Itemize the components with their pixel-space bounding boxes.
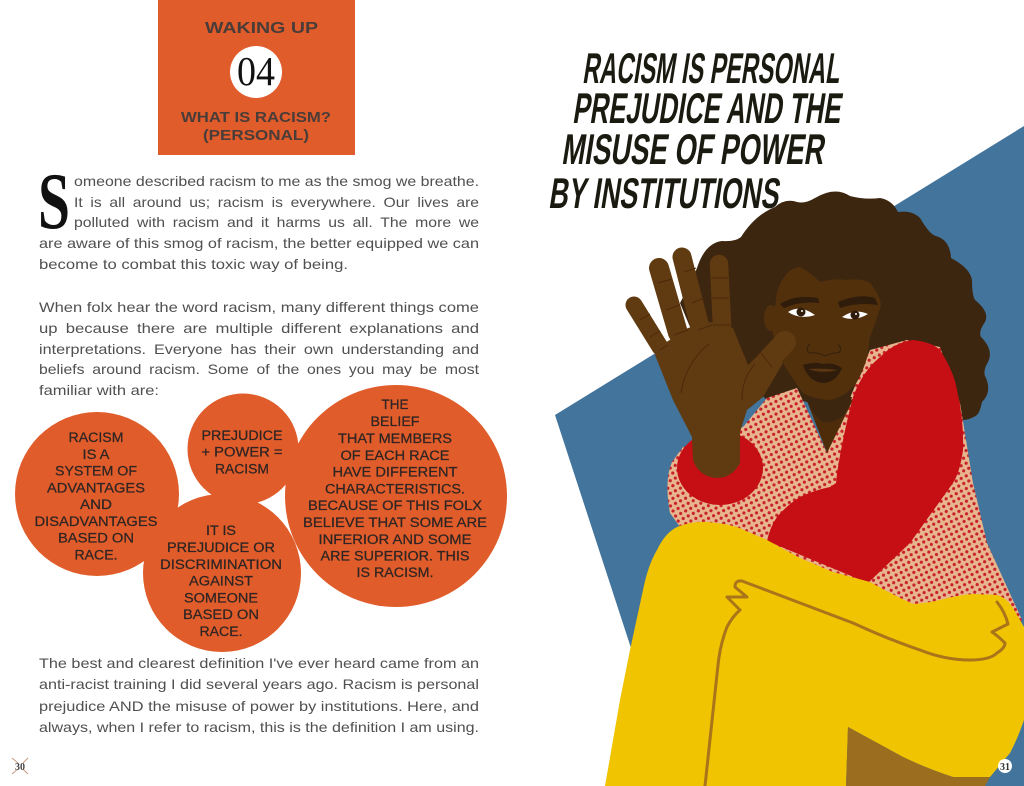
- bubble: belief about races: THE: [382, 397, 408, 412]
- palm creases: [640, 268, 772, 400]
- eye: left: [788, 308, 815, 317]
- page number 30: [12, 758, 28, 774]
- lips: [803, 363, 842, 383]
- nose: [807, 344, 840, 356]
- bubble: belief about races: THAT MEMBERS: [338, 431, 452, 446]
- drop cap S: S: [38, 158, 70, 246]
- bubble: system of advantages: RACISM: [68, 430, 124, 445]
- text block: second paragraph: [39, 299, 479, 398]
- illustration: woman holding up hand: [605, 191, 1024, 786]
- neck: [805, 396, 853, 453]
- text block: opening paragraph with drop cap: are aware of this smog of racism, the better equipped we can: [39, 235, 479, 251]
- bubble: system of advantages: IS A: [82, 447, 110, 462]
- text block: second paragraph: beliefs around racism. Some of the ones you may be most: [39, 361, 479, 377]
- bubble: belief about races: ARE SUPERIOR. THIS: [320, 548, 470, 564]
- chapter number badge: 04: [237, 48, 275, 94]
- page number 30: 30: [15, 762, 25, 773]
- text block: second paragraph: When folx hear the word racism, many different things come: [39, 299, 479, 315]
- heading: what is racism: [181, 109, 331, 144]
- text block: opening paragraph with drop cap: It is all around us; racism is everywhere. Our lives are: [74, 194, 479, 210]
- heading: waking up: WAKING UP: [205, 20, 318, 37]
- heading: what is racism: (PERSONAL): [203, 127, 309, 144]
- bubble: system of advantages: RACE.: [74, 548, 118, 562]
- bubble: prejudice plus power: PREJUDICE: [202, 428, 282, 443]
- eyebrows: [780, 296, 878, 308]
- thumb: [752, 342, 785, 378]
- text block: closing paragraph: [39, 655, 479, 735]
- neck shadow: [805, 396, 852, 422]
- trouser outline: [705, 581, 1008, 786]
- bubble: prejudice or discrimination: SOMEONE: [184, 590, 258, 606]
- bubble: belief about races: INFERIOR AND SOME: [318, 532, 472, 547]
- bubble: prejudice or discrimination: PREJUDICE OR: [167, 540, 275, 555]
- chapter number badge: [230, 46, 282, 98]
- bubble: prejudice plus power: RACISM: [215, 462, 269, 476]
- text block: second paragraph: up because there are multiple different explanations and: [39, 320, 479, 336]
- bubble: belief about races: IS RACISM.: [356, 565, 434, 580]
- text block: opening paragraph with drop cap: [38, 158, 479, 272]
- red cuff: [677, 431, 763, 505]
- bubble: prejudice or discrimination: IT IS: [206, 523, 236, 538]
- header panel: chapter label: [158, 0, 355, 155]
- text block: closing paragraph: The best and clearest definition I've ever heard came from an: [39, 655, 479, 671]
- yellow trousers: [605, 522, 1024, 786]
- ear: [764, 305, 778, 331]
- shin shadow: [846, 727, 990, 786]
- bubble: prejudice plus power: [188, 394, 298, 504]
- headline quote: [546, 45, 846, 218]
- pinky finger: [634, 305, 660, 347]
- red sleeve: [767, 340, 963, 583]
- bubble: belief about races: BECAUSE OF THIS FOLX: [308, 498, 482, 513]
- bubble: system of advantages: BASED ON: [58, 530, 134, 546]
- headline quote: MISUSE OF POWER: [559, 126, 829, 174]
- page number 31: [998, 759, 1012, 773]
- hand: [634, 257, 785, 478]
- bubble: prejudice or discrimination: DISCRIMINATION: [160, 557, 282, 572]
- bubble: system of advantages: DISADVANTAGES: [34, 514, 158, 529]
- blouse with polka dots: [667, 340, 1022, 640]
- ring finger: [659, 268, 678, 333]
- text block: second paragraph: familiar with are:: [39, 382, 159, 398]
- bubble: prejudice or discrimination: RACE.: [200, 624, 242, 639]
- text block: opening paragraph with drop cap: omeone described racism to me as the smog we breathe.: [74, 173, 479, 189]
- index finger: [719, 264, 722, 325]
- bubble: prejudice or discrimination: AGAINST: [189, 574, 253, 588]
- bubble: belief about races: BELIEF: [370, 414, 420, 429]
- headline quote: BY INSTITUTIONS: [546, 170, 784, 218]
- text block: opening paragraph with drop cap: become to combat this toxic way of being.: [39, 256, 348, 272]
- text block: closing paragraph: prejudice AND the misuse of power by institutions. Here, and: [39, 698, 479, 714]
- bubble: prejudice or discrimination: BASED ON: [183, 607, 259, 622]
- hair: [680, 191, 990, 430]
- middle finger: [682, 257, 700, 327]
- bubble: system of advantages: [15, 412, 179, 576]
- headline quote: PREJUDICE AND THE: [570, 85, 846, 133]
- text block: opening paragraph with drop cap: polluted with racism and it harms us all. The more we: [74, 214, 479, 230]
- bubble: prejudice or discrimination: [143, 494, 301, 652]
- blue background shape: [555, 126, 1024, 786]
- bubble: belief about races: CHARACTERISTICS.: [325, 482, 465, 496]
- bubble: belief about races: [285, 385, 507, 607]
- bubble: belief about races: HAVE DIFFERENT: [332, 464, 458, 480]
- text block: second paragraph: interpretations. Everyone has their own understanding and: [39, 341, 479, 357]
- bubble: system of advantages: AND: [80, 497, 112, 512]
- bubble: system of advantages: ADVANTAGES: [47, 480, 145, 496]
- bubble: prejudice plus power: + POWER =: [202, 444, 283, 460]
- text block: closing paragraph: always, when I refer to racism, this is the definition I am using.: [39, 719, 479, 735]
- bubble: belief about races: OF EACH RACE: [340, 448, 450, 463]
- bubble: belief about races: BELIEVE THAT SOME ARE: [303, 515, 487, 530]
- page number 31: 31: [1000, 762, 1010, 773]
- text block: closing paragraph: anti-racist training I did several years ago. Racism is personal: [39, 676, 479, 692]
- bubble: system of advantages: SYSTEM OF: [55, 464, 137, 478]
- eye: right: [842, 310, 868, 320]
- face: [772, 267, 881, 400]
- heading: what is racism: WHAT IS RACISM?: [181, 109, 331, 126]
